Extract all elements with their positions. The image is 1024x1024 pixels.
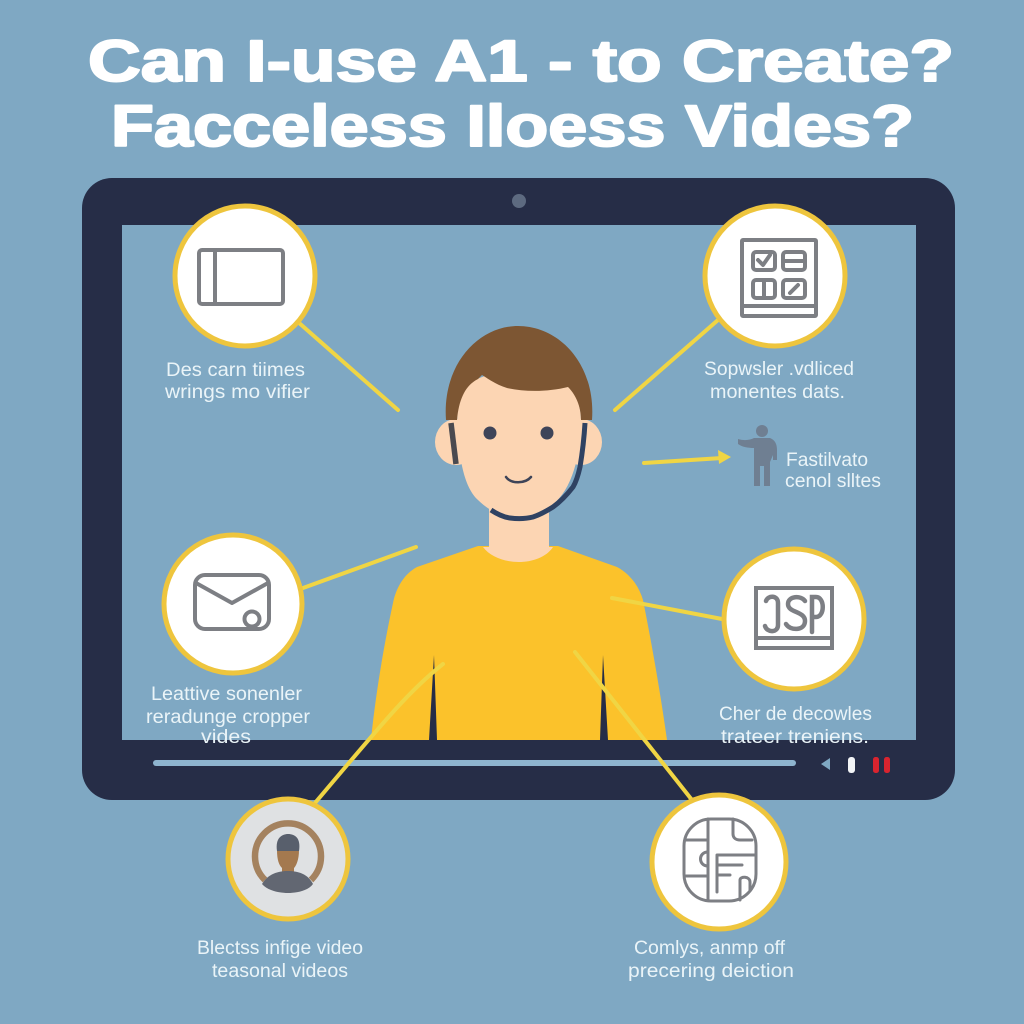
panel: middle right bbox=[719, 549, 872, 748]
title bbox=[88, 29, 954, 159]
ears bbox=[435, 419, 477, 465]
panel: middle left bbox=[146, 535, 311, 748]
shirt bbox=[371, 546, 667, 740]
icon: presenter bbox=[738, 425, 777, 486]
caption: Blectss infige video bbox=[197, 938, 363, 959]
caption: precering deiction bbox=[628, 961, 794, 982]
icon: JSP board bbox=[756, 588, 832, 648]
caption bbox=[628, 938, 794, 982]
mouth bbox=[506, 477, 531, 482]
caption: teasonal videos bbox=[212, 961, 348, 982]
icon: envelope bbox=[195, 575, 269, 629]
caption: monentes dats. bbox=[710, 382, 845, 403]
presenter caption: cenol slltes bbox=[785, 471, 881, 492]
caption: wrings mo vifier bbox=[164, 382, 311, 403]
caption: trateer treniens. bbox=[721, 727, 869, 748]
central person bbox=[371, 326, 667, 740]
eyes bbox=[484, 426, 496, 440]
caption: reradunge cropper bbox=[146, 707, 311, 728]
presenter caption: Fastilvato bbox=[786, 450, 868, 471]
icon: document circuit bbox=[684, 819, 756, 901]
icon: avatar bbox=[255, 823, 321, 893]
neck bbox=[483, 500, 553, 562]
caption: vides bbox=[201, 727, 251, 748]
caption bbox=[704, 359, 854, 403]
icon: window bbox=[199, 250, 283, 304]
caption: Des carn tiimes bbox=[166, 360, 305, 381]
caption: Comlys, anmp off bbox=[634, 938, 786, 959]
title: Can I-use A1 - to Create? bbox=[88, 29, 954, 94]
icon: checklist board bbox=[742, 240, 816, 316]
hair bbox=[446, 326, 592, 420]
arm slits bbox=[429, 655, 608, 740]
caption bbox=[197, 938, 363, 982]
caption: Sopwsler .vdliced bbox=[704, 359, 854, 380]
headset strap bbox=[451, 423, 456, 464]
player controls bbox=[153, 757, 890, 773]
presenter caption bbox=[785, 450, 881, 492]
panel: top right bbox=[704, 206, 854, 403]
connector lines bbox=[298, 320, 722, 803]
caption bbox=[719, 704, 872, 748]
caption bbox=[164, 360, 311, 403]
face bbox=[457, 370, 581, 518]
panel: bottom left bbox=[197, 799, 363, 982]
title: Facceless Iloess Vides? bbox=[111, 94, 914, 159]
panel: bottom right bbox=[628, 795, 794, 982]
arrow to presenter bbox=[644, 450, 731, 464]
laptop frame bbox=[82, 178, 955, 800]
caption: Leattive sonenler bbox=[151, 684, 303, 705]
caption: Cher de decowles bbox=[719, 704, 872, 725]
panel: top left bbox=[164, 206, 315, 403]
caption bbox=[146, 684, 311, 748]
